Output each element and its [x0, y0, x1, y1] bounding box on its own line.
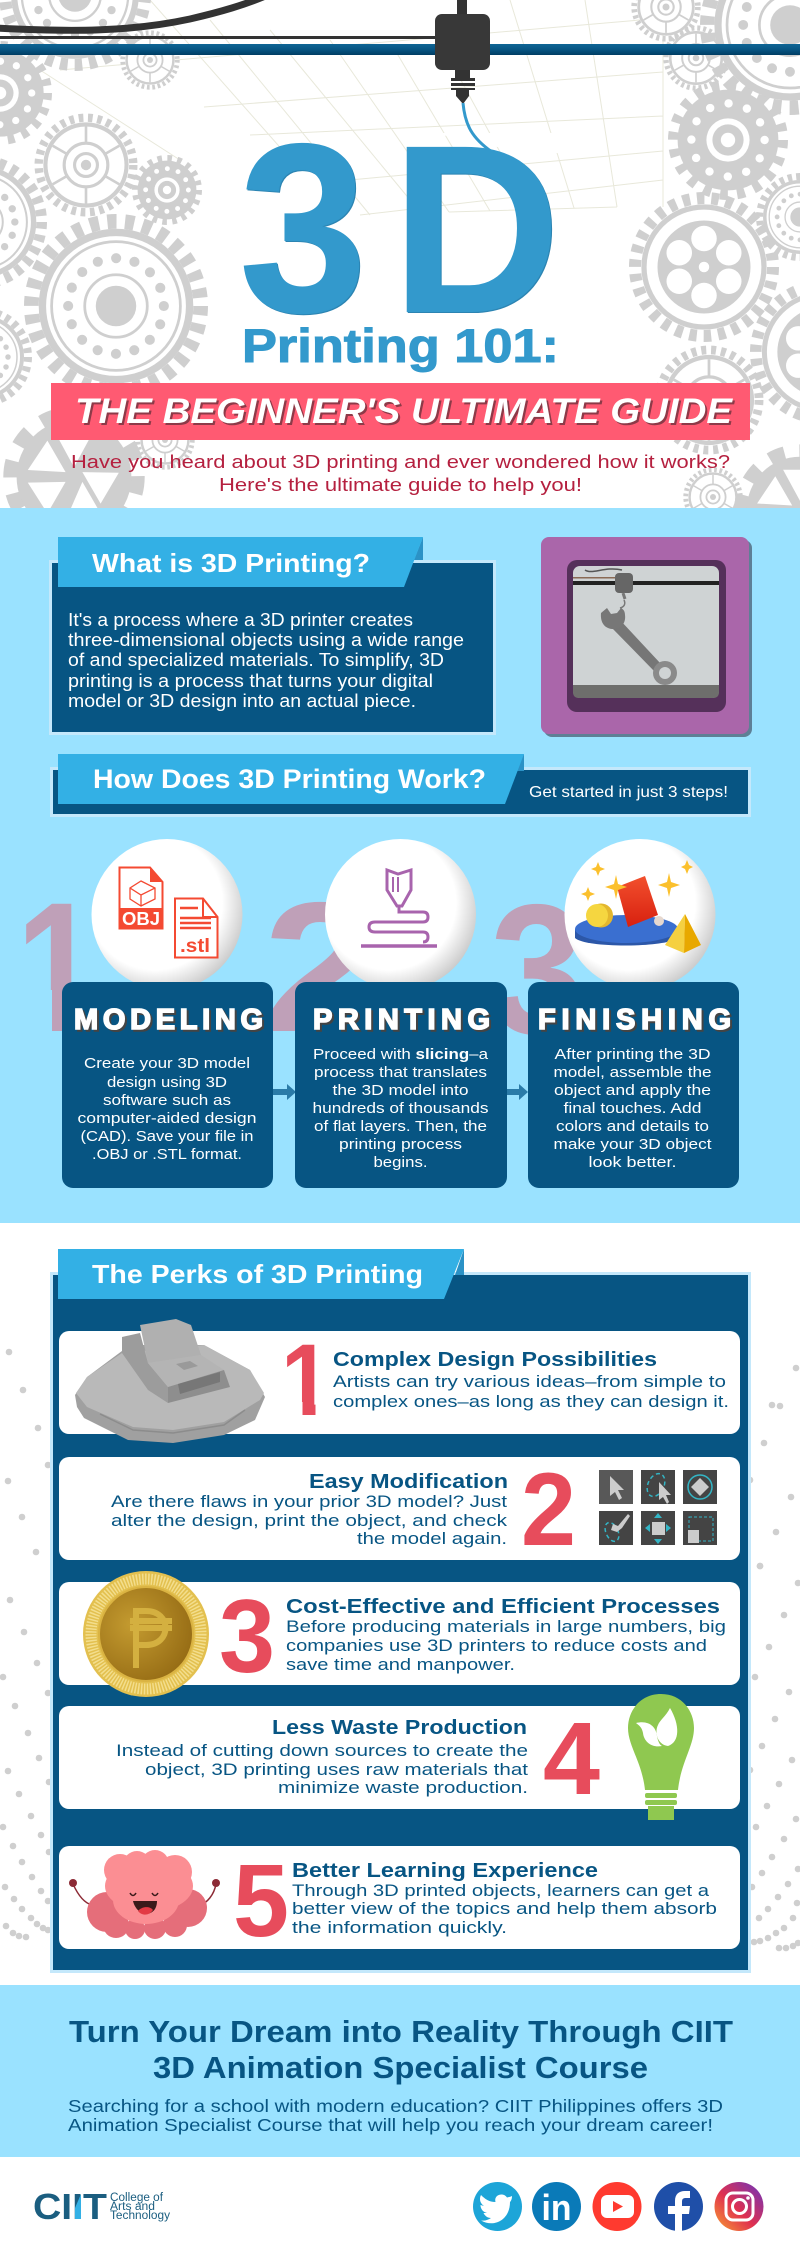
logo: CIIT: Arts and [110, 2201, 155, 2213]
banner: ultimate guide: THE BEGINNER'S ULTIMATE GUIDE [75, 392, 734, 431]
logo: CIIT: CIIT [33, 2186, 107, 2227]
body text: model, assemble the [554, 1064, 712, 1081]
card: FINISHING [538, 1004, 731, 1036]
title: Better Learning Experience [292, 1860, 598, 1882]
text: Before producing materials in large numbers, big [286, 1618, 726, 1636]
title: Complex Design Possibilities [333, 1349, 657, 1371]
body text [312, 1046, 489, 1171]
body text: design using 3D [107, 1074, 227, 1091]
text: Through 3D printed objects, learners can get a [292, 1882, 710, 1900]
icons: modeling tools [599, 1470, 717, 1545]
heading: FINISHING [540, 1006, 733, 1038]
body text: Animation Specialist Course that will help you reach your dream career! [68, 2115, 713, 2135]
body text [78, 1055, 256, 1163]
title: Printing 101: Printing 101: [242, 319, 559, 372]
heading: Turn Your Dream into Reality Through CIIT [69, 2014, 733, 2049]
card [528, 982, 739, 1188]
body text: model or 3D design into an actual piece. [68, 691, 416, 711]
text: better view of the topics and help them absorb [292, 1900, 717, 1918]
body text: Create your 3D model [84, 1055, 250, 1072]
number 2: 2 [521, 1452, 576, 1568]
heading: 3D Animation Specialist Course [153, 2050, 648, 2085]
body text: printing process [339, 1136, 462, 1153]
body text: It's a process where a 3D printer creates [68, 610, 413, 630]
title: 3D [239, 94, 565, 364]
panel: how does 3D printing work [52, 754, 750, 816]
text: minimize waste production. [278, 1779, 528, 1797]
text [116, 1742, 529, 1797]
icon: instagram [714, 2182, 764, 2231]
body text: of flat layers. Then, the [314, 1118, 487, 1135]
body text: Searching for a school with modern education? CIIT Philippines offers 3D [68, 2096, 723, 2116]
title: 3D: 3 [239, 94, 367, 362]
logo: CIIT [33, 2186, 170, 2227]
background dots [0, 1349, 800, 1951]
body text: printing is a process that turns your digital [68, 671, 433, 691]
panel: call to action [0, 1985, 800, 2157]
big step numbers [0, 865, 585, 1073]
card: PRINTING [313, 1004, 490, 1036]
text [286, 1618, 726, 1674]
heading: What is 3D Printing? [92, 548, 370, 578]
icon: nozzle and printed layers [325, 839, 476, 990]
panel: the perks of 3D printing [52, 1249, 750, 1972]
number 5: 5 [233, 1843, 289, 1958]
big step numbers: 1 [16, 865, 99, 1071]
printer rail and cable [0, 0, 800, 55]
body text: begins. [374, 1154, 428, 1171]
icon: youtube [592, 2182, 642, 2231]
text: the information quickly. [292, 1919, 507, 1937]
card [295, 982, 507, 1188]
heading: The Perks of 3D Printing [92, 1259, 423, 1289]
text: save time and manpower. [286, 1656, 515, 1674]
body text [68, 610, 464, 711]
body text: colors and details to [556, 1118, 709, 1135]
number 1: 1 [281, 1323, 331, 1437]
perk 3 [59, 1571, 740, 1697]
banner: ultimate guide: THE BEGINNER'S ULTIMATE GUIDE [77, 394, 736, 433]
perk 1 [59, 1319, 740, 1443]
title: 3D: D [392, 96, 562, 364]
intro text: Here's the ultimate guide to help you! [219, 475, 582, 495]
body text: hundreds of thousands [312, 1100, 488, 1117]
body text: Proceed with slicing –a [313, 1046, 489, 1063]
panel: hero header [0, 0, 800, 568]
body text: look better. [588, 1154, 676, 1171]
arrow: step 1 to 2 [273, 1084, 296, 1100]
text: Artists can try various ideas–from simple to [333, 1373, 726, 1391]
body text: process that translates [314, 1064, 487, 1081]
body text: (CAD). Save your file in [80, 1128, 254, 1145]
subheading: Get started in just 3 steps! [529, 784, 728, 801]
step 3: finishing [528, 839, 739, 1188]
body text: After printing the 3D [554, 1046, 711, 1063]
number 3: 3 [219, 1579, 275, 1695]
icon: twitter [473, 2182, 522, 2231]
title: 3D: D [391, 95, 561, 363]
body text: make your 3D object [554, 1136, 712, 1153]
title: 3D: 3 [240, 95, 368, 363]
body text: final touches. Add [564, 1100, 702, 1117]
icon: facebook [654, 2182, 703, 2231]
text: the model again. [357, 1530, 507, 1548]
heading [69, 2014, 733, 2085]
body text: object and apply the [554, 1082, 711, 1099]
card [62, 982, 273, 1188]
text: Instead of cutting down sources to create the [116, 1742, 528, 1760]
icon: linkedin: in [542, 2187, 572, 2228]
perk 2 [59, 1452, 740, 1568]
number 4: 4 [543, 1701, 600, 1816]
heading: How Does 3D Printing Work? [93, 764, 486, 794]
intro text [71, 452, 730, 495]
big step numbers: 2 [263, 865, 378, 1071]
icon: OBJ and STL files: .stl [180, 936, 210, 957]
printer head [435, 0, 490, 104]
body text [554, 1046, 712, 1171]
body text: computer-aided design [78, 1110, 256, 1127]
body text: the 3D model into [332, 1082, 468, 1099]
intro text: Have you heard about 3D printing and ever wondered how it works? [71, 452, 730, 472]
banner: ultimate guide [51, 383, 750, 440]
card: MODELING [74, 1004, 263, 1036]
arrow: step 2 to 3 [507, 1084, 528, 1100]
social icons [473, 2182, 764, 2231]
logo: CIIT: Technology [110, 2210, 170, 2222]
icon: smiling brain [69, 1850, 220, 1939]
background gears [0, 0, 800, 568]
body text: of and specialized materials. To simplify, 3D [68, 650, 444, 670]
body text: .OBJ or .STL format. [92, 1146, 242, 1163]
text: Are there flaws in your prior 3D model? Just [111, 1493, 508, 1511]
icon: gold peso coin [83, 1571, 209, 1697]
body text [68, 2096, 723, 2135]
text [333, 1373, 729, 1411]
step 2: printing [295, 839, 507, 1188]
icon: OBJ and STL files [92, 839, 242, 990]
step 1: modeling [62, 839, 273, 1188]
icon: 3D printer printing a wrench [541, 537, 752, 737]
text: alter the design, print the object, and check [111, 1512, 508, 1530]
text [292, 1882, 717, 1937]
icon: gray 3D car model [75, 1319, 265, 1443]
title: Easy Modification [309, 1471, 508, 1493]
text [111, 1493, 508, 1548]
text: companies use 3D printers to reduce costs and [286, 1637, 707, 1655]
icon: linkedin [532, 2182, 581, 2231]
icon: finished 3D objects [564, 839, 716, 990]
heading: PRINTING [315, 1006, 492, 1038]
big step numbers: 3 [490, 867, 585, 1073]
heading: MODELING [76, 1006, 265, 1038]
icon: OBJ and STL files: OBJ [122, 909, 160, 929]
panel: what is 3D printing [50, 537, 494, 734]
perk 4 [59, 1694, 740, 1820]
perk 5 [59, 1843, 740, 1958]
text: object, 3D printing uses raw materials that [145, 1761, 529, 1779]
text: complex ones–as long as they can design it. [333, 1393, 729, 1411]
body text: software such as [103, 1092, 231, 1109]
title: Cost-Effective and Efficient Processes [286, 1596, 720, 1618]
icon: green light bulb with leaves [628, 1694, 694, 1820]
panel: blue section background [0, 508, 800, 1223]
logo: CIIT: College of [110, 2192, 164, 2204]
body text: three-dimensional objects using a wide range [68, 630, 464, 650]
title: Less Waste Production [272, 1717, 527, 1739]
